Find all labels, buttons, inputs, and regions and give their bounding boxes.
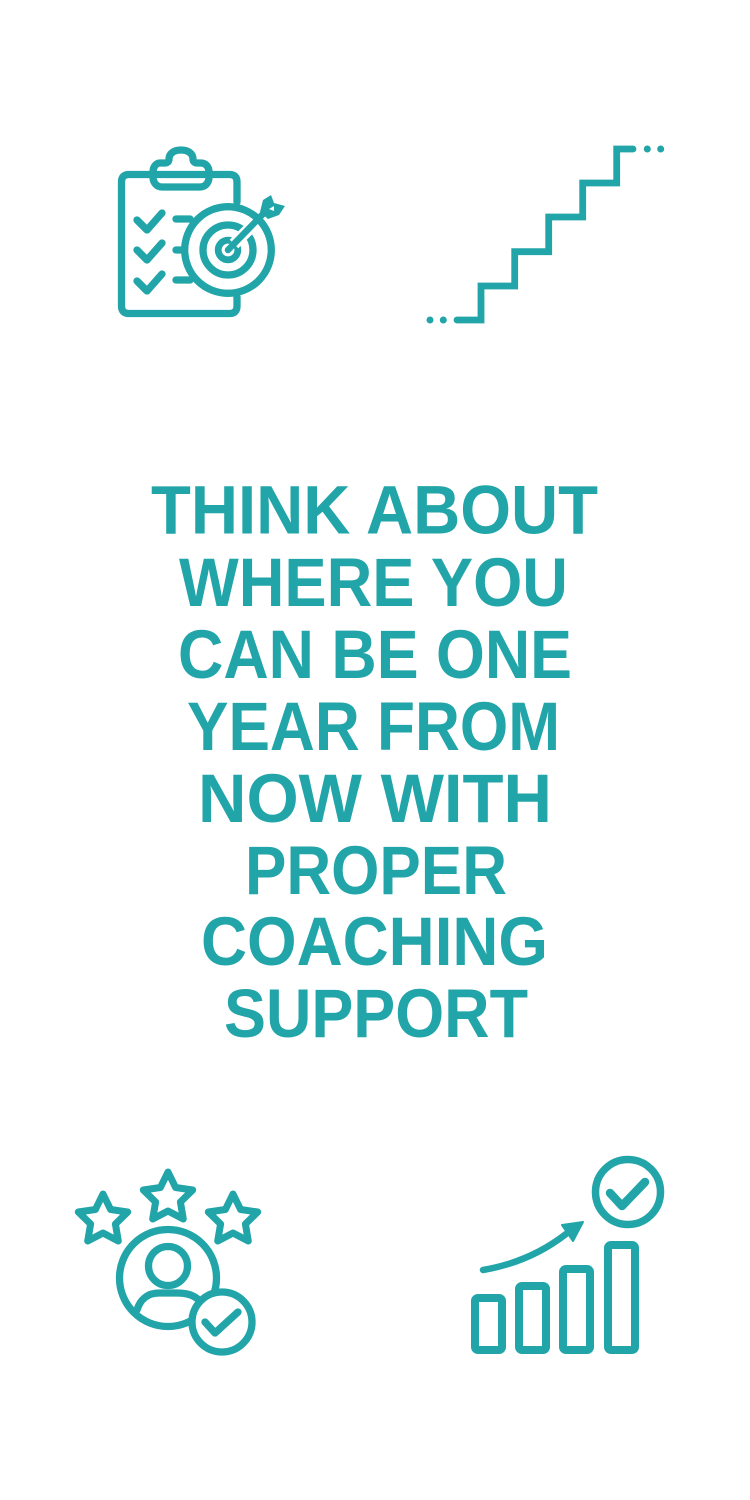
- heading: CAN BE ONE: [178, 616, 572, 693]
- stars: [78, 1172, 258, 1241]
- checklist ticks: [137, 213, 162, 291]
- checklist lines: [176, 219, 190, 280]
- clipboard clip: [153, 150, 209, 187]
- arrow shaft: [228, 214, 263, 250]
- icon: person with stars: [78, 1172, 258, 1352]
- badge tick: [205, 1312, 238, 1333]
- target rings: [185, 207, 271, 293]
- person head: [148, 1246, 188, 1286]
- heading: COACHING: [201, 903, 548, 980]
- heading: PROPER: [245, 832, 507, 909]
- heading: THINK ABOUT: [151, 472, 598, 548]
- check circle: [596, 1160, 660, 1224]
- arrow head: [562, 1222, 583, 1241]
- shaft gap: [234, 228, 250, 244]
- growth arrow: [483, 1234, 566, 1270]
- heading: NOW WITH: [198, 760, 552, 837]
- heading: YEAR FROM: [187, 688, 560, 765]
- stair line: [457, 149, 633, 320]
- heading: WHERE YOU: [179, 544, 568, 621]
- arrow feathers: [260, 195, 285, 219]
- heading: SUPPORT: [224, 975, 528, 1052]
- icon: staircase: [426, 146, 664, 324]
- icon: clipboard with target: [122, 150, 285, 314]
- heading: [151, 472, 598, 1052]
- icon: rising bar chart: [475, 1160, 660, 1350]
- person shoulders: [137, 1293, 199, 1310]
- circle tick: [610, 1182, 645, 1206]
- stair dots: [426, 146, 664, 324]
- bars: [475, 1245, 635, 1350]
- person circle: [120, 1230, 216, 1326]
- clipboard body: [122, 174, 237, 314]
- check badge: [192, 1292, 252, 1352]
